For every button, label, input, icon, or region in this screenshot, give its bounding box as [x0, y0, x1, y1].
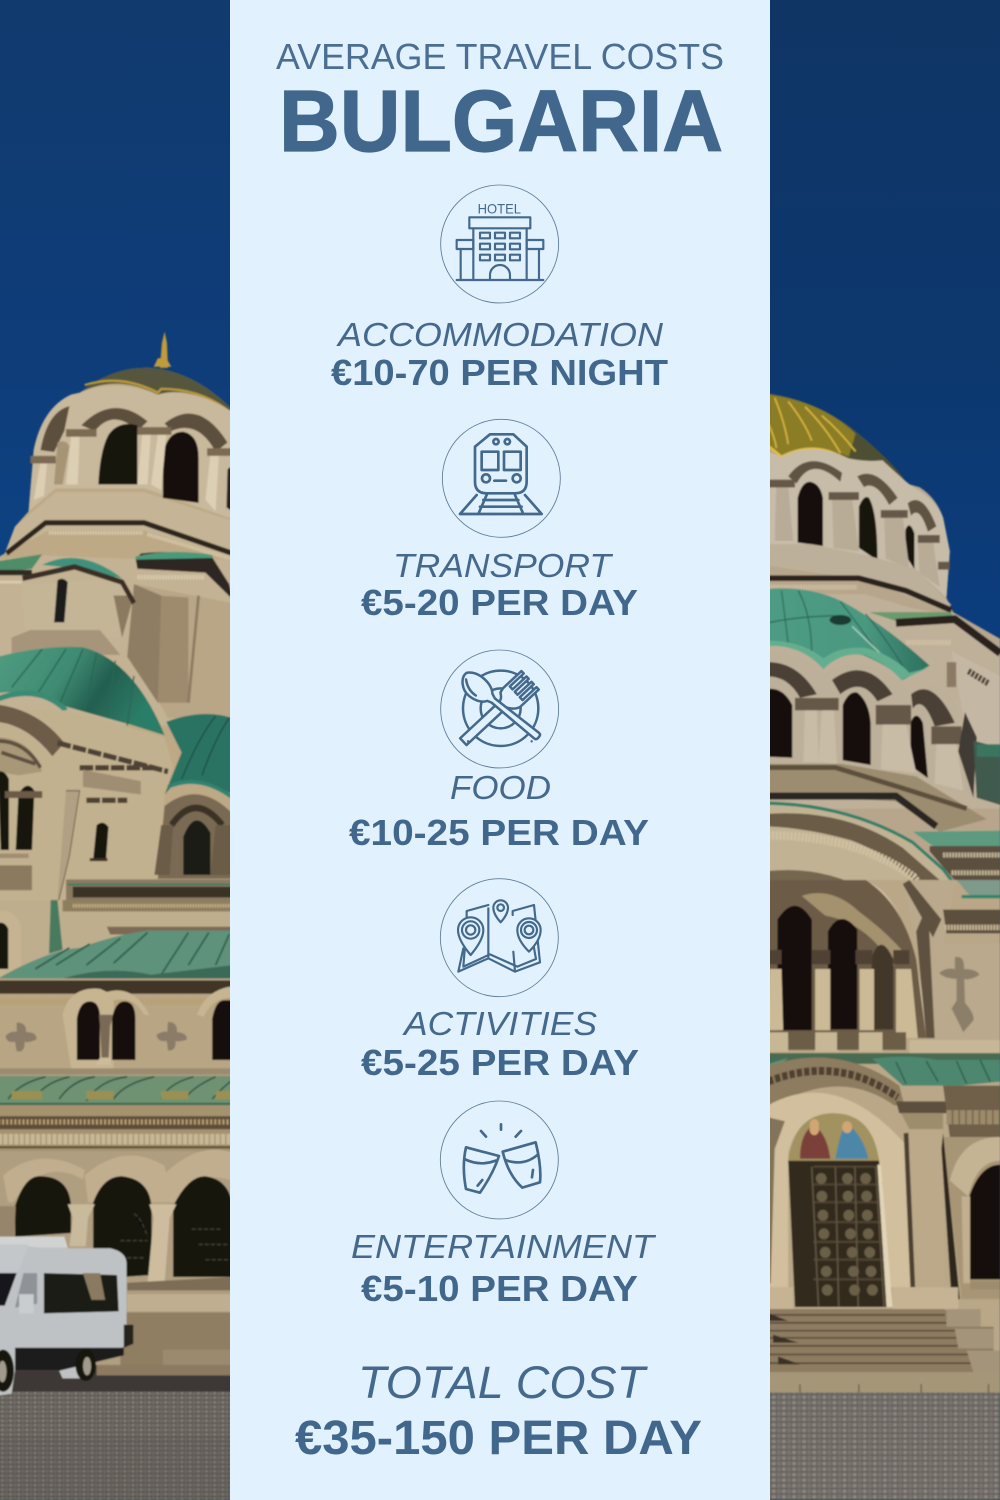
icon: hotel [441, 185, 559, 303]
photo: cathedral right upper part [768, 394, 1000, 940]
label: entertainment: ENTERTAINMENT [351, 1228, 657, 1265]
cost: transport: €5-20 PER DAY [361, 582, 638, 623]
icon: folded map with pins [440, 879, 558, 997]
photo: cathedral left lower part [0, 900, 233, 1500]
label: accommodation: ACCOMMODATION [336, 316, 663, 353]
photo: Alexander Nevsky cathedral [0, 331, 1000, 1500]
icon: clinking glasses [440, 1101, 558, 1219]
cost: food: €10-25 PER DAY [349, 812, 649, 853]
photo: cathedral right lower part [768, 880, 1000, 1500]
label: food: FOOD [450, 769, 551, 806]
title line: average travel costs: AVERAGE TRAVEL COSTS [276, 36, 724, 77]
total cost value: €35-150 PER DAY [295, 1412, 702, 1465]
cost: activities: €5-25 PER DAY [361, 1042, 639, 1083]
title line: country: BULGARIA [279, 73, 723, 170]
title [276, 36, 724, 170]
centre panel [230, 0, 770, 1500]
photo: cathedral left upper part [0, 331, 233, 920]
label: transport: TRANSPORT [393, 547, 614, 584]
cost: accommodation: €10-70 PER NIGHT [331, 352, 668, 393]
icon: plate, spoon and fork [441, 650, 559, 768]
cost: entertainment: €5-10 PER DAY [361, 1268, 638, 1309]
icon: train [442, 419, 560, 537]
icon sign: hotel word: HOTEL [478, 200, 521, 216]
total cost label: TOTAL COST [358, 1357, 649, 1408]
label: activities: ACTIVITIES [402, 1005, 597, 1042]
